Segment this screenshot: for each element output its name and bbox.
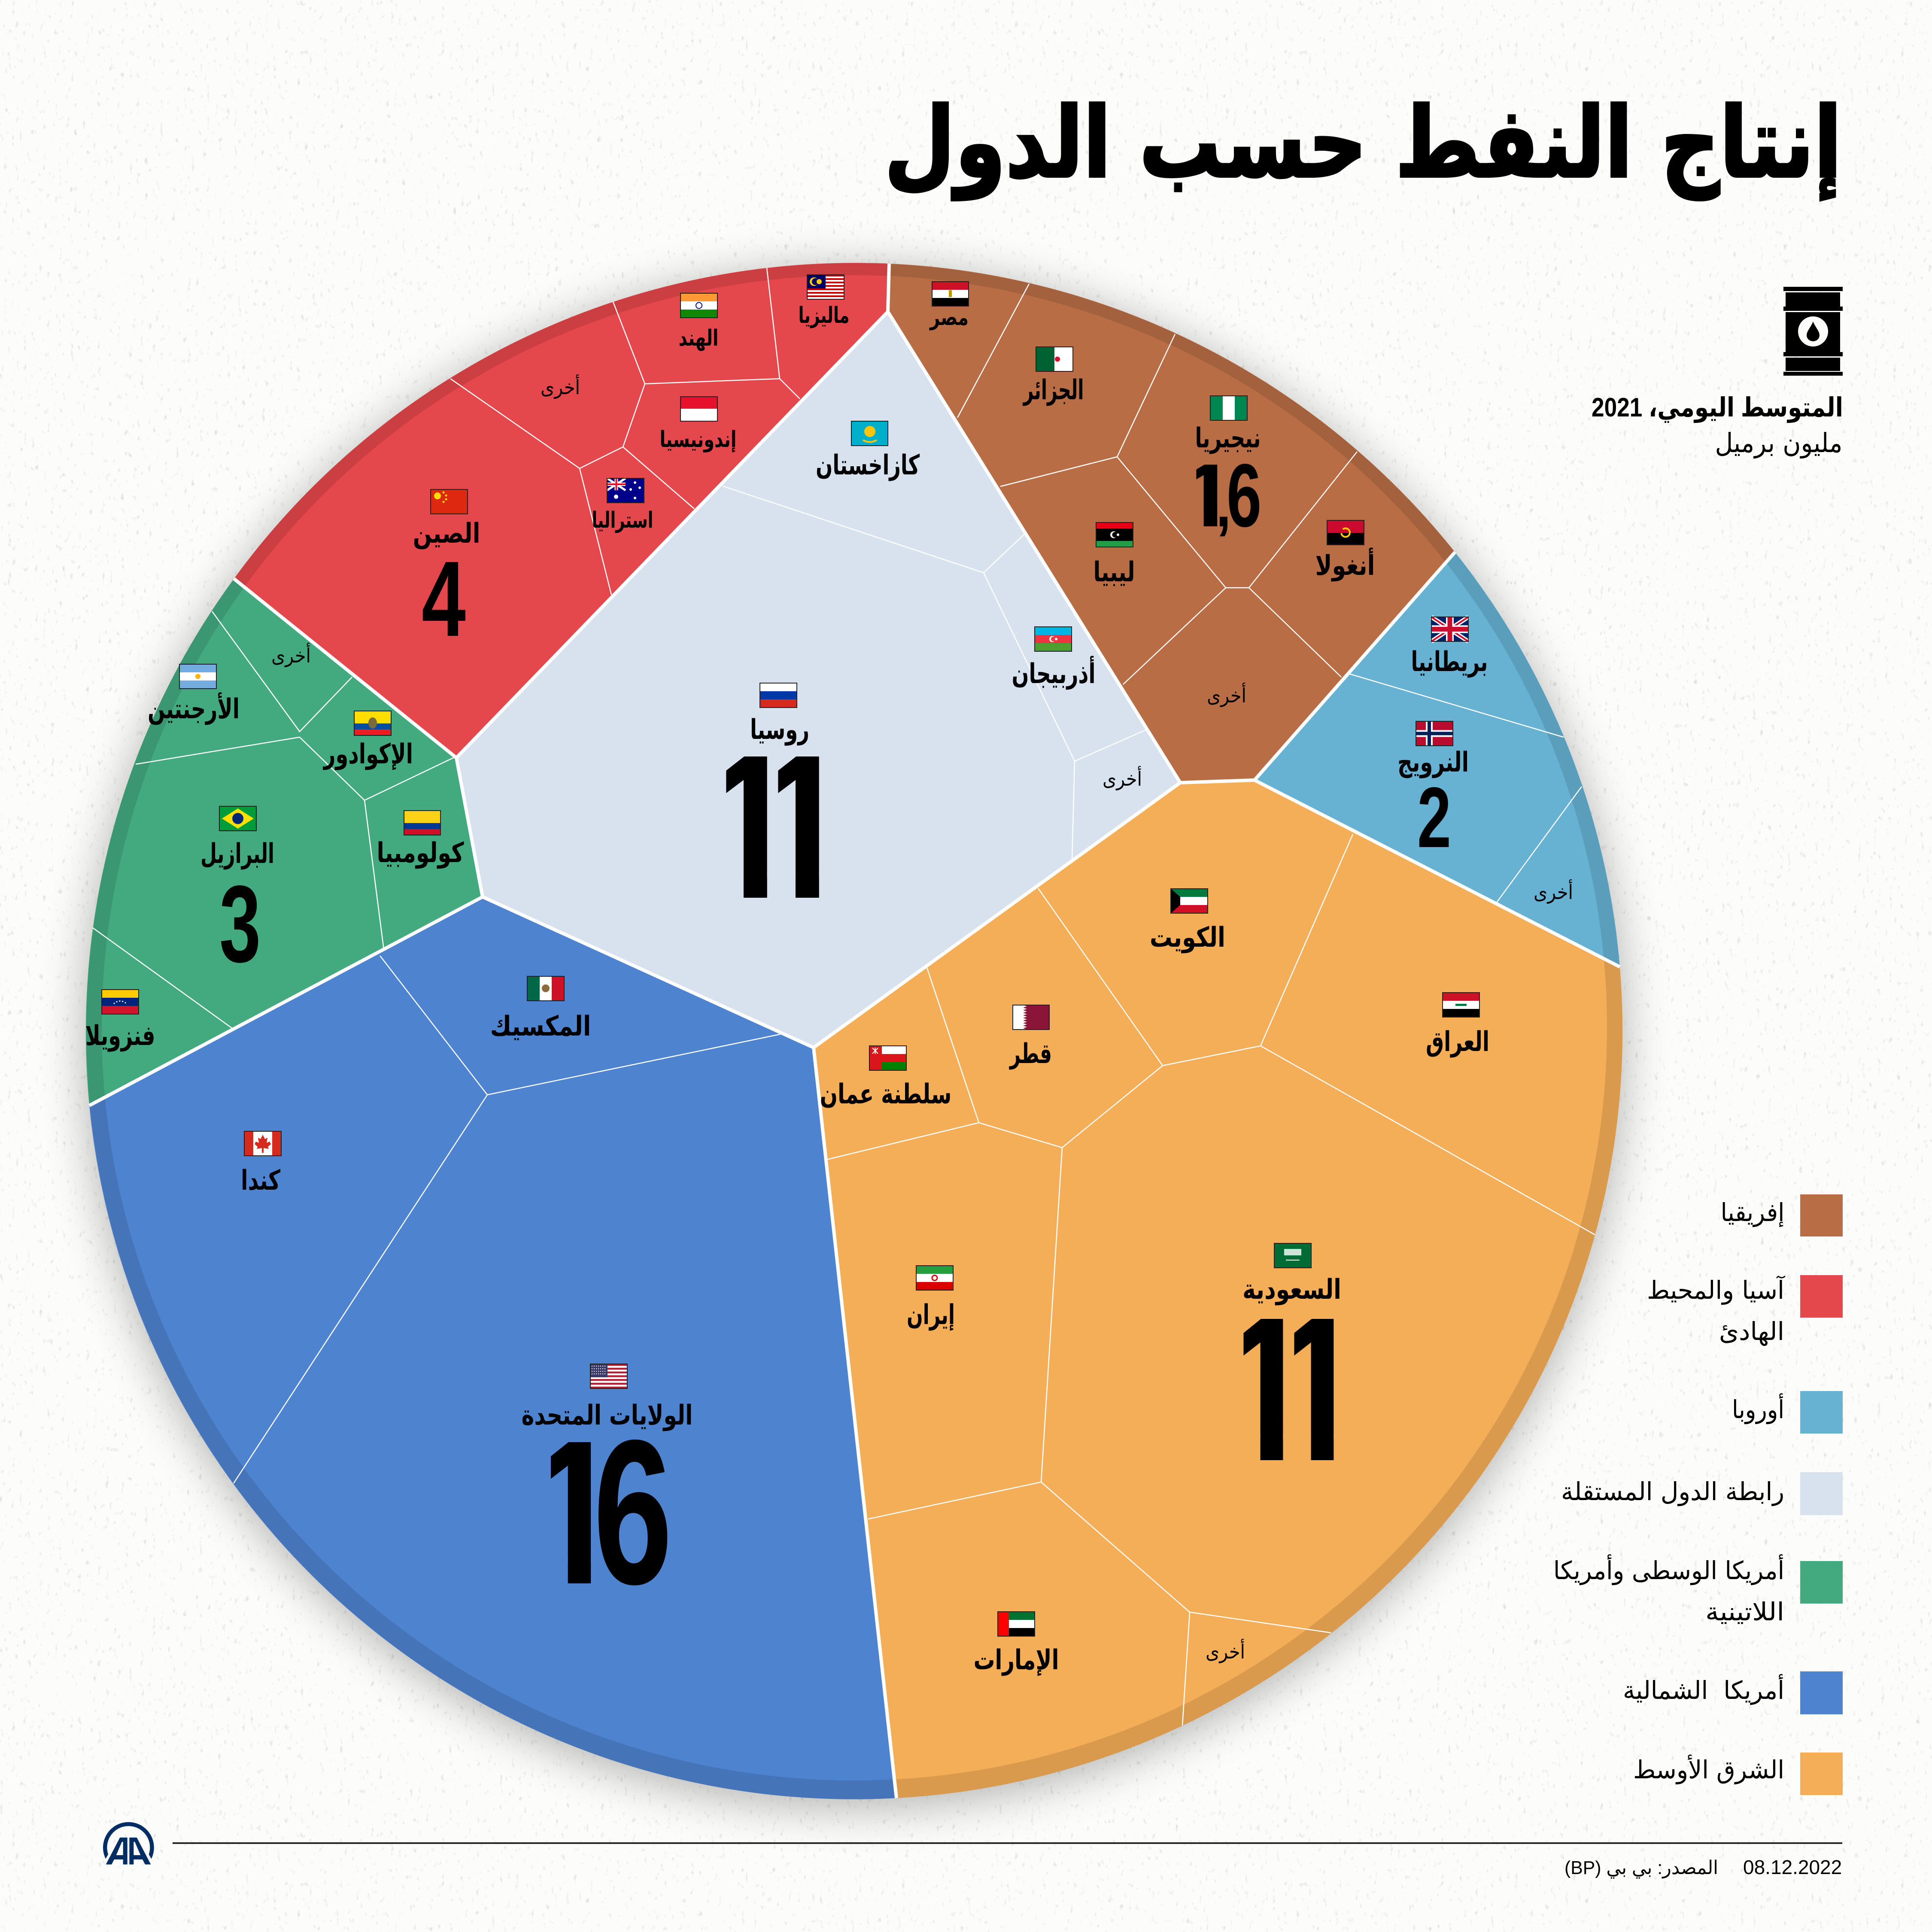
legend item: Central and Latin America: اللاتينية [1705,1597,1784,1626]
label: Oman: سلطنة عمان [820,1078,951,1110]
label: Nigeria [1196,395,1260,537]
label: Angola [1315,520,1375,582]
label: Malaysia [799,275,849,328]
source and date: المصدر: بي بي (BP) [1564,1857,1718,1879]
label: UAE: الإمارات [974,1644,1059,1676]
legend item: Europe [1732,1391,1843,1434]
legend item: Europe: أوروبا [1732,1393,1784,1425]
voronoi pie chart [86,263,1622,1799]
label: Oman [820,1046,951,1110]
legend item: Asia Pacific: آسيا والمحيط [1647,1275,1786,1305]
label: China [413,489,480,659]
legend item: CIS: رابطة الدول المستقلة [1561,1477,1784,1507]
source and date [1564,1856,1842,1879]
region: Latin America [86,579,483,1106]
region: Middle East [814,780,1622,1798]
label: other Europe: أخرى [1534,879,1573,904]
label: other CIS: أخرى [1103,766,1142,791]
legend item: Central and Latin America: أمريكا الوسطى وأمريكا [1553,1554,1784,1586]
label: Saudi Arabia [1222,1243,1364,1504]
label: Ecuador: الإكوادور [323,738,413,770]
value: Nigeria 1,6: 6 [1227,446,1261,546]
legend item: Middle East [1633,1753,1843,1795]
label: Canada: كندا [241,1165,281,1197]
label: Argentina: الأرجنتين [148,692,240,725]
label: Russia [726,683,819,898]
circle shadow [86,270,1623,1807]
label: Colombia [377,811,464,869]
label: Azerbaijan [1012,627,1096,690]
label: Angola: أنغولا [1315,547,1375,582]
legend item: Central and Latin America [1553,1554,1843,1626]
value: Saudi Arabia 11: 1 [1222,1274,1314,1504]
region: CIS [456,312,1180,1048]
label: Venezuela: فنزويلا [85,1020,155,1052]
label: Kazakhstan [816,421,920,481]
label: Brazil: البرازيل [200,838,274,870]
label: Venezuela [85,990,155,1052]
label: Argentina [148,664,240,725]
label: Colombia: كولومبيا [377,837,464,869]
label: other Latin America: أخرى [271,643,311,668]
value: Russia 11 [726,756,819,898]
legend item: Asia Pacific: الهادئ [1719,1317,1784,1346]
label: Mexico: المكسيك [490,1011,591,1042]
label: Azerbaijan: أذربيجان [1012,656,1096,690]
value: Nigeria 1,6 [1181,445,1261,546]
value: Russia 11: 1 [704,712,799,942]
label: United Kingdom [1411,617,1488,678]
region: Asia Pacific [234,263,889,758]
label: Brazil [200,806,274,985]
legend item: Africa [1721,1194,1843,1236]
label: Algeria: الجزائر [1023,374,1084,406]
label: Nigeria: نيجيريا [1195,422,1261,454]
label: India: الهند [678,325,719,351]
subtitle: مليون برميل [1715,427,1843,459]
label: Saudi Arabia: السعودية [1242,1274,1341,1306]
legend item: CIS [1561,1472,1843,1515]
label: Malaysia: ماليزيا [799,303,849,328]
source and date: 08.12.2022 [1743,1856,1842,1878]
value: Saudi Arabia 11 [1222,1274,1364,1504]
legend item: Africa: إفريقيا [1721,1198,1784,1227]
legend [1553,1194,1843,1795]
legend item: North America [1623,1671,1843,1714]
value: United States 16: 6 [593,1397,672,1627]
value: China 4: 4 [422,539,466,659]
subtitle [1592,393,1843,459]
value: United States 16 [529,1397,672,1627]
label: Libya: ليبيا [1093,556,1135,588]
label: Kuwait: الكويت [1150,922,1225,954]
value: Russia 11: 1 [756,712,851,942]
label: Kazakhstan: كازاخستان [816,450,920,481]
label: Mexico [490,976,591,1042]
label: Indonesia [659,397,737,453]
label: Qatar: قطر [1009,1038,1052,1070]
label: Canada [241,1131,281,1197]
label: Egypt: مصر [929,305,969,331]
label: Qatar [1009,1005,1052,1070]
legend item: Asia Pacific [1647,1275,1843,1346]
subtitle: المتوسط اليومي، 2021 [1592,393,1843,423]
label: Algeria [1023,347,1084,406]
label: United States [521,1364,693,1627]
label: UAE [974,1612,1059,1676]
label: other Africa: أخرى [1207,683,1246,708]
label: Iraq [1426,993,1489,1058]
label: Russia: روسيا [750,714,809,746]
label: United Kingdom: بريطانيا [1411,646,1488,678]
footer rule [173,1842,1842,1844]
value: Nigeria 1,6: 1 [1181,445,1236,546]
label: Australia [592,478,653,533]
icon: AA logo [103,1822,154,1865]
label: Egypt [929,282,969,331]
label: other Middle East: أخرى [1206,1639,1245,1664]
label: Iran: إيران [907,1299,955,1331]
label: China: الصين [413,518,480,550]
value: Nigeria 1,6: , [1216,468,1231,540]
value: United States 16: 1 [529,1397,622,1627]
label: Indonesia: إندونيسيا [659,427,737,453]
region: Europe [1255,552,1620,967]
outer rim shading [86,263,1622,1799]
value: Saudi Arabia 11: 1 [1273,1274,1364,1504]
label: Kuwait [1150,889,1225,954]
region: North America [89,897,896,1799]
label: United States: الولايات المتحدة [521,1400,693,1431]
legend item: North America: أمريكا الشمالية [1623,1674,1784,1705]
label: Norway [1397,721,1469,866]
label: India [678,293,719,351]
label: Australia: استراليا [592,507,653,533]
label: Ecuador [323,711,413,770]
label: Iran [907,1266,955,1331]
label: Norway: النرويج [1397,747,1469,778]
value: Brazil 3: 3 [219,863,261,985]
icon: oil barrel [1783,287,1843,376]
region: Africa [888,264,1455,783]
value: Norway 2: 2 [1417,769,1451,866]
label: Libya [1093,522,1135,588]
legend item: Middle East: الشرق الأوسط [1633,1754,1784,1785]
label: Iraq: العراق [1426,1026,1489,1058]
label: other Asia: أخرى [541,374,580,399]
